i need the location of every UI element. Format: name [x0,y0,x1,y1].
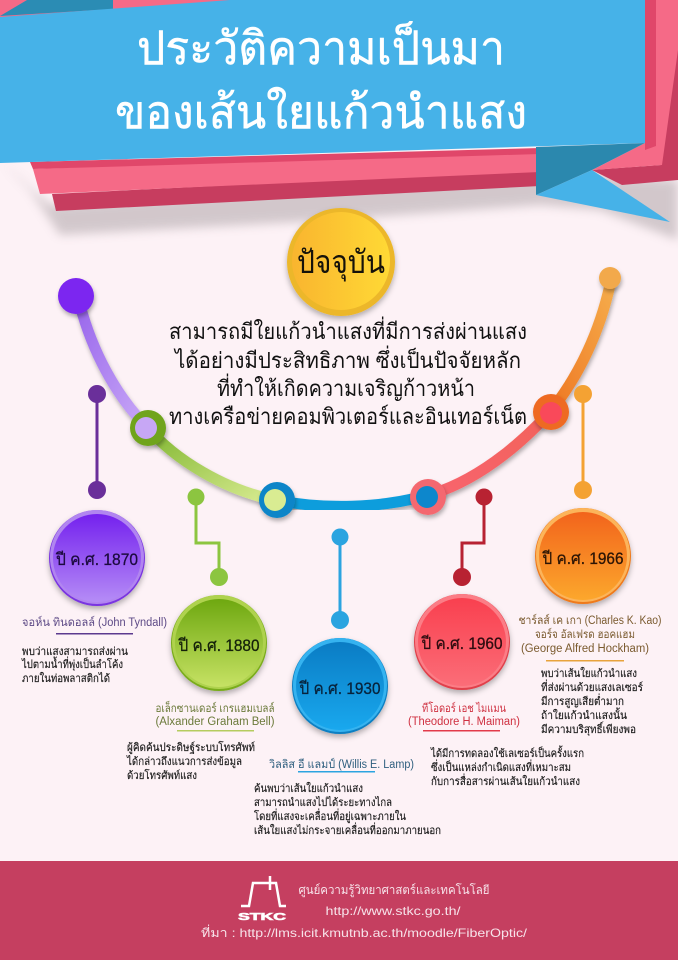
present description [169,316,527,429]
text: Tyndall description: ภายในท่อพลาสติกได้ [22,672,110,685]
name: Theodore H. Maiman: (Theodore H. Maiman) [408,716,520,728]
text: Bell description: ได้กล่าวถึงแนวการส่งข้อมูล [126,755,242,768]
year circle 1966 [535,508,631,604]
footer text: ศูนย์ความรู้วิทยาศาสตร์และเทคโนโลยี [298,883,490,898]
text: Kao description: ที่ส่งผ่านด้วยแสงเลเซอร์ [541,679,643,694]
name: Alexander Graham Bell [156,700,275,732]
title [115,21,527,138]
text: Kao description: พบว่าเส้นใยแก้วนำแสง [541,667,637,680]
present description: ทางเครือข่ายคอมพิวเตอร์และอินเทอร์เน็ต [169,402,527,429]
icon: STKC logo: STKC [238,912,286,923]
text: Tyndall description: พบว่าแสงสามารถส่งผ่าน [22,646,128,658]
text: Maiman description [430,745,584,788]
text: Lamp description: โดยที่แสงจะเคลื่อนที่อยู่เฉพาะภายใน [254,808,406,823]
text: Tyndall description: ไปตามน้ำที่พุ่งเป็นลำโค้ง [21,656,123,671]
year circle 1870: ปี ค.ศ. 1870 [55,550,138,569]
connector: 1870 [88,385,106,499]
text: Lamp description: ค้นพบว่าเส้นใยแก้วนำแสง [254,782,363,795]
name: Willis E. Lamp: วิลลิส อี แลมป์ (Willis E. Lamp) [268,757,414,771]
year circle 1880: ปี ค.ศ. 1880 [178,636,260,655]
footer text: http://www.stkc.go.th/ [326,904,461,918]
text: Lamp description: สามารถนำแสงไปได้ระยะทางไกล [254,796,392,809]
header banner [0,0,678,240]
connector: 1880 [188,488,228,586]
present circle [287,208,395,316]
text: Maiman description: ได้มีการทดลองใช้เลเซอร์เป็นครั้งแรก [430,745,584,760]
present circle: ปัจจุบัน [297,244,385,282]
text: Kao description: มีความบริสุทธิ์เพียงพอ [541,721,636,736]
footer text: ที่มา : http://lms.icit.kmutnb.ac.th/moodle/FiberOptic/ [201,924,528,940]
text: Bell description: ผู้คิดค้นประดิษฐ์ระบบโทรศัพท์ [127,740,255,754]
name: John Tyndall: จอห์น ทินดอลล์ (John Tyndall) [22,615,167,629]
connector: 1930 [331,528,349,629]
name: Charles K. Kao and George Alfred Hockham: จอร์จ อัลเฟรด ฮอคแฮม [535,627,635,641]
footer [0,861,678,960]
year circle 1880 [171,595,267,691]
name: Alexander Graham Bell: (Alxander Graham Bell) [156,716,275,728]
title: ประวัติความเป็นมา [137,21,505,74]
name: Theodore H. Maiman: ทีโอดอร์ เอช ไมแมน [422,701,506,715]
icon: STKC logo [238,876,286,923]
present description: ที่ทำให้เกิดความเจริญก้าวหน้า [217,373,475,401]
text: Kao description: มีการสูญเสียต่ำมาก [541,693,624,708]
text: Maiman description: กับการสื่อสารผ่านเส้นใยแก้วนำแสง [431,773,580,788]
year circle 1870 [49,510,145,606]
text: Bell description: ด้วยโทรศัพท์แสง [127,768,197,782]
name: Charles K. Kao and George Alfred Hockham [518,613,662,662]
text: Kao description: ถ้าใยแก้วนำแสงนั้น [541,707,627,722]
year circle 1966: ปี ค.ศ. 1966 [542,549,624,568]
text: Maiman description: ซึ่งเป็นแหล่งกำเนิดแสงที่เหมาะสม [431,759,571,774]
present description: ได้อย่างมีประสิทธิภาพ ซึ่งเป็นปัจจัยหลัก [173,345,521,373]
year circle 1960 [414,594,510,690]
year circle 1960: ปี ค.ศ. 1960 [421,634,502,653]
footer text [201,883,528,940]
title: ของเส้นใยแก้วนำแสง [115,86,527,138]
text: Lamp description [254,782,441,837]
name: Theodore H. Maiman [408,701,520,732]
text: Tyndall description [21,646,128,685]
name: Charles K. Kao and George Alfred Hockham: (George Alfred Hockham) [521,643,649,655]
timeline nodes [58,267,621,518]
text: Bell description [126,740,255,782]
year circle 1930 [292,638,388,734]
timeline curve [80,285,610,506]
connector: 1966 [574,385,592,499]
connector: 1960 [453,488,492,586]
text: Kao description [541,667,643,736]
text: Lamp description: เส้นใยแสงไม่กระจายเคลื่อนที่ออกมาภายนอก [254,822,441,837]
year circle 1930: ปี ค.ศ. 1930 [299,679,380,698]
name: Charles K. Kao and George Alfred Hockham: ชาร์ลส์ เค เกา (Charles K. Kao) [518,613,662,627]
present description: สามารถมีใยแก้วนำแสงที่มีการส่งผ่านแสง [169,316,527,344]
name: Alexander Graham Bell: อเล็กซานเดอร์ เกรแฮมเบลล์ [156,700,274,715]
